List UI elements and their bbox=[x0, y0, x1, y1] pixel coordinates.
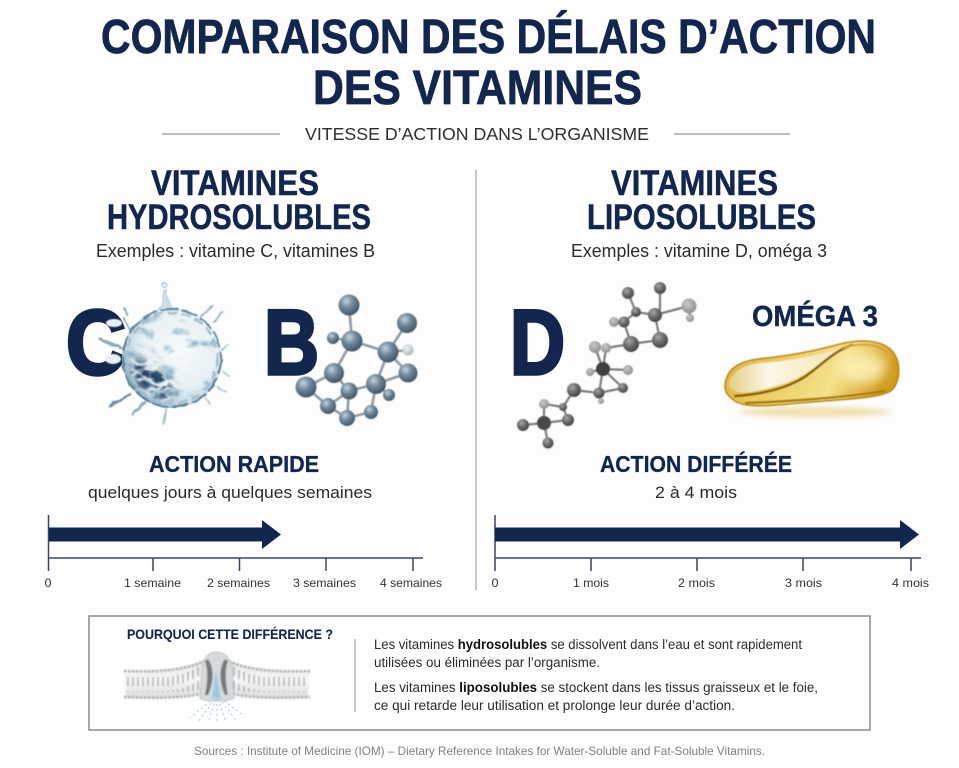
duration text: right: 2 à 4 mois bbox=[655, 483, 737, 502]
axis labels: weeks: 0 bbox=[44, 576, 52, 590]
examples text: Exemples : vitamine D, oméga 3 bbox=[571, 241, 827, 261]
arrow: action différée bbox=[495, 520, 919, 549]
timeline: months bbox=[492, 515, 929, 590]
axis labels: weeks: 4 semaines bbox=[380, 576, 442, 590]
heading: hydrosolubles bbox=[107, 164, 371, 237]
heading: pourquoi: POURQUOI CETTE DIFFÉRENCE ? bbox=[127, 626, 333, 642]
icon: omega 3 capsule bbox=[725, 341, 899, 417]
subtitle: VITESSE D’ACTION DANS L’ORGANISME bbox=[305, 124, 649, 144]
examples text: Exemples : vitamine C, vitamines B bbox=[96, 241, 375, 261]
axis labels: weeks: 3 semaines bbox=[293, 576, 356, 590]
icon: vitamin B molecule bbox=[296, 294, 418, 426]
arrow: action rapide bbox=[49, 520, 281, 549]
heading: liposolubles bbox=[587, 164, 816, 237]
icon: vitamin B letter: B bbox=[264, 292, 319, 394]
axis labels: months bbox=[492, 576, 929, 590]
panel: vitamines liposolubles bbox=[492, 164, 929, 590]
label: action rapide: ACTION RAPIDE bbox=[149, 451, 319, 477]
axis labels: months: 3 mois bbox=[785, 576, 822, 590]
explanation text bbox=[374, 637, 818, 713]
duration text: left: quelques jours à quelques semaines bbox=[88, 483, 372, 502]
heading: liposolubles: VITAMINES bbox=[611, 164, 778, 203]
icon: water sphere bbox=[100, 282, 229, 424]
panel: vitamines hydrosolubles bbox=[44, 164, 442, 590]
axis labels: months: 4 mois bbox=[892, 576, 929, 590]
explanation text: Les vitamines liposolubles se stockent dans les tissus graisseux et le foie, bbox=[374, 680, 818, 695]
axis labels: months: 1 mois bbox=[573, 576, 609, 590]
timeline: weeks bbox=[44, 515, 442, 590]
title bbox=[101, 10, 876, 115]
axis labels: months: 0 bbox=[492, 576, 499, 590]
title: DES VITAMINES bbox=[313, 62, 642, 115]
heading: liposolubles: LIPOSOLUBLES bbox=[587, 198, 816, 237]
sources: Sources : Institute of Medicine (IOM) – Dietary Reference Intakes for Water-Soluble and Fat-Soluble Vitamins. bbox=[194, 744, 765, 758]
explanation text: utilisées ou éliminées par l’organisme. bbox=[374, 655, 600, 670]
explanation text: Les vitamines hydrosolubles se dissolvent dans l’eau et sont rapidement bbox=[374, 637, 802, 652]
heading: hydrosolubles: VITAMINES bbox=[151, 164, 319, 203]
axis labels: weeks: 1 semaine bbox=[124, 576, 181, 590]
icon: vitamin D letter: D bbox=[510, 292, 565, 394]
label: action différée: ACTION DIFFÉRÉE bbox=[600, 450, 792, 477]
icon: vitamin D molecule bbox=[517, 282, 696, 448]
axis labels: months: 2 mois bbox=[678, 576, 715, 590]
heading: hydrosolubles: HYDROSOLUBLES bbox=[107, 198, 371, 237]
explanation text: ce qui retarde leur utilisation et prolonge leur durée d’action. bbox=[374, 698, 735, 713]
icon: cell membrane channel bbox=[124, 652, 310, 724]
axis labels: weeks bbox=[44, 576, 442, 590]
icon: vitamin C letter: C bbox=[66, 292, 126, 394]
panel: pourquoi cette différence bbox=[89, 616, 870, 730]
label: oméga 3: OMÉGA 3 bbox=[752, 301, 878, 333]
axis labels: weeks: 2 semaines bbox=[207, 576, 270, 590]
